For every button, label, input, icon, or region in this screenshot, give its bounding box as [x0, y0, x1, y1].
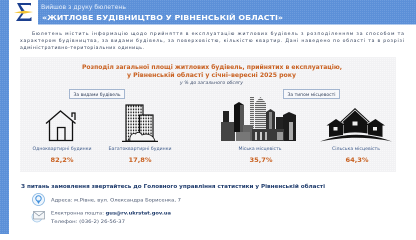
icon: apartment buildings [122, 105, 158, 142]
header banner [38, 0, 416, 24]
address: Адреса: м.Рівне, вул. Олександра Борисенка, 7 [51, 198, 181, 204]
label: rural: Сільська місцевість [332, 146, 381, 151]
button: by locality type [284, 90, 340, 98]
phone: Телефон: (036-2) 26-56-37 [50, 219, 125, 225]
icon: location pin [32, 194, 44, 206]
email: Електронна пошта: gus@rv.ukrstat.gov.ua [51, 210, 171, 216]
panel heading: у Рівненській області у січні–вересні 2025 року [127, 72, 296, 79]
value: multi-family: 17,8% [128, 156, 152, 164]
button: by locality type: За типом місцевості [288, 92, 336, 97]
icon: mail envelope [32, 212, 44, 222]
label: multi-family: Багатоквартирні будинки [108, 146, 172, 151]
panel: distribution [20, 57, 396, 172]
intro paragraph [20, 30, 404, 51]
label: single-family: Одноквартирні будинки [32, 146, 92, 151]
panel heading: Розподіл загальної площі житлових будівель, прийнятих в експлуатацію, [82, 64, 342, 71]
label: urban: Міська місцевість [238, 146, 282, 151]
panel heading [82, 64, 342, 79]
icon: statistics logo [14, 3, 33, 21]
icon: single-family house [46, 111, 76, 140]
panel subtitle: у % до загального обсягу [179, 80, 244, 85]
intro paragraph: адміністративно-територіальних одиниць. [20, 45, 144, 51]
icon: rural houses [320, 108, 392, 142]
value: single-family: 82,2% [50, 156, 74, 164]
contact heading: З питань замовлення звертайтесь до Головного управління статистики у Рівненській області [21, 183, 325, 190]
button: by building type [70, 90, 124, 98]
header title: «ЖИТЛОВЕ БУДІВНИЦТВО У РІВНЕНСЬКІЙ ОБЛАСТІ» [42, 13, 283, 22]
left strip [0, 0, 9, 234]
value: rural: 64,3% [346, 156, 369, 164]
intro paragraph: характером будівництва, за видами будівель, за поверховістю, кількістю квартир. Дані наведено по області та в розрізі [20, 38, 404, 44]
value: urban: 35,7% [250, 156, 273, 164]
intro paragraph: Бюлетень містить інформацію щодо прийняття в експлуатацію житлових будівель з розподіленням за способом та [32, 30, 404, 37]
header kicker: Вийшов з друку бюлетень [41, 4, 126, 11]
icon: city skyline [221, 97, 296, 141]
button: by building type: За видами будівель [74, 92, 121, 97]
